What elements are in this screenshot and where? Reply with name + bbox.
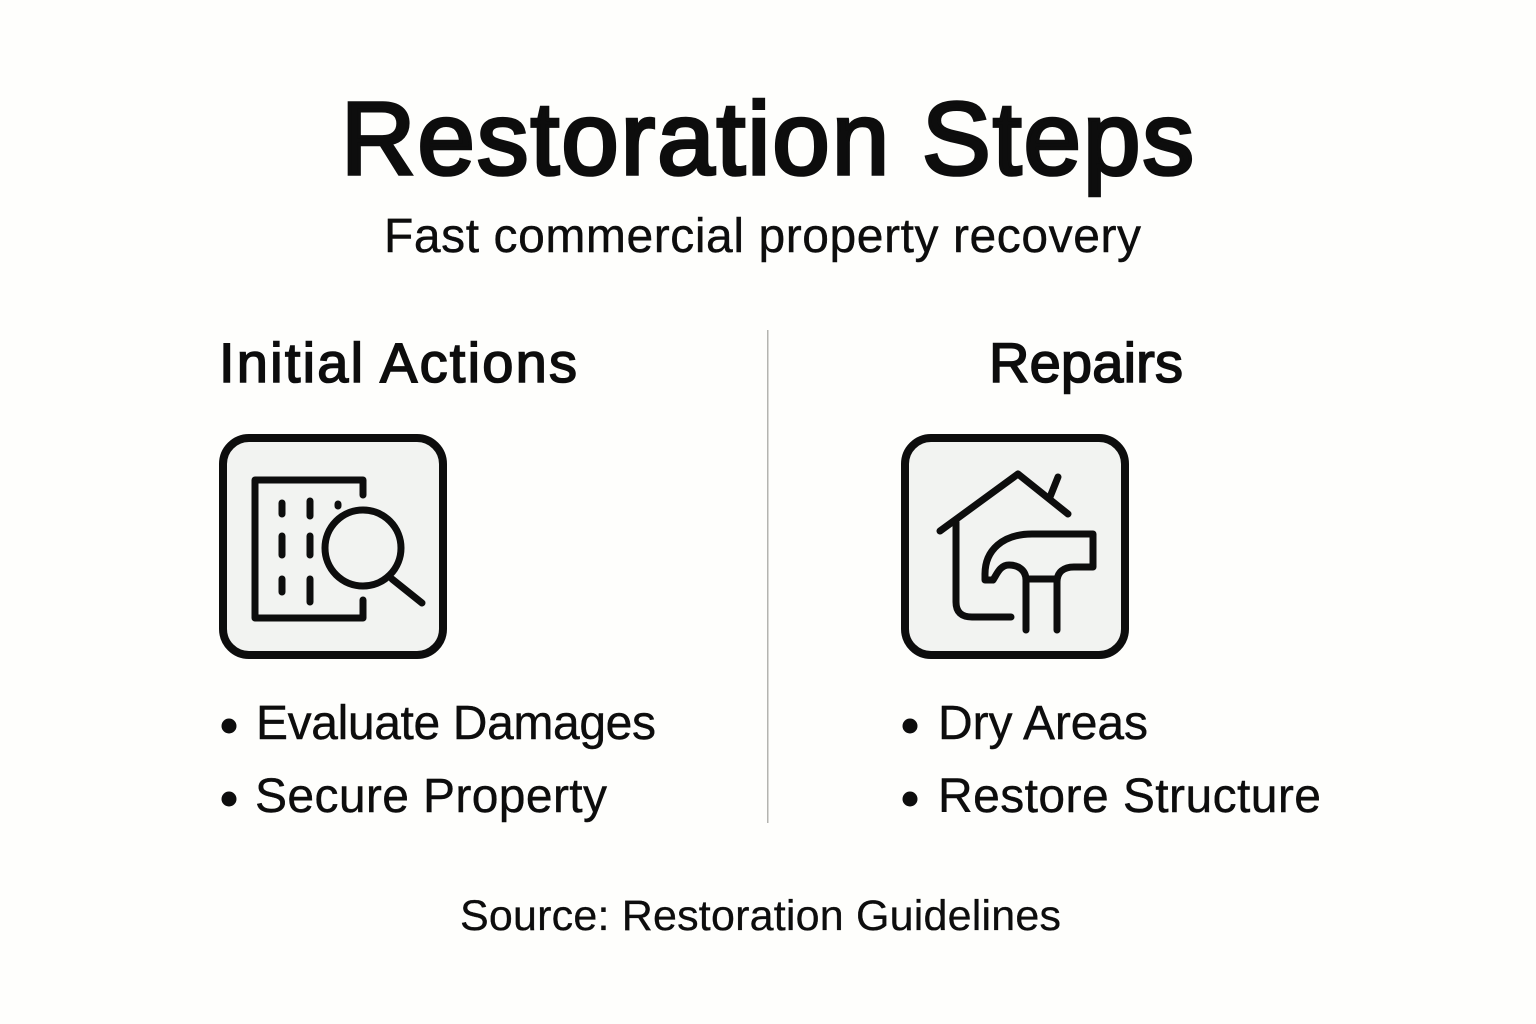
- source note: Source: Restoration Guidelines: [460, 892, 1061, 940]
- divider: [767, 330, 768, 823]
- icon: house with hammer: [905, 438, 1125, 655]
- title: Restoration Steps: [341, 81, 1194, 196]
- bullet item: dry areas: Dry Areas: [938, 697, 1148, 750]
- panel: repairs: [902, 331, 1321, 823]
- bullet item: secure property: Secure Property: [255, 770, 607, 823]
- heading: initial actions: Initial Actions: [219, 331, 577, 394]
- bullet list: initial actions: [222, 697, 656, 823]
- panel: initial actions: [219, 331, 656, 823]
- heading: repairs: Repairs: [989, 331, 1183, 394]
- bullet item: evaluate damages: Evaluate Damages: [256, 697, 656, 750]
- bullet list: repairs: [902, 697, 1321, 823]
- subtitle: Fast commercial property recovery: [384, 210, 1141, 263]
- icon: building with magnifying glass: [223, 438, 443, 655]
- bullet item: restore structure: Restore Structure: [938, 770, 1321, 823]
